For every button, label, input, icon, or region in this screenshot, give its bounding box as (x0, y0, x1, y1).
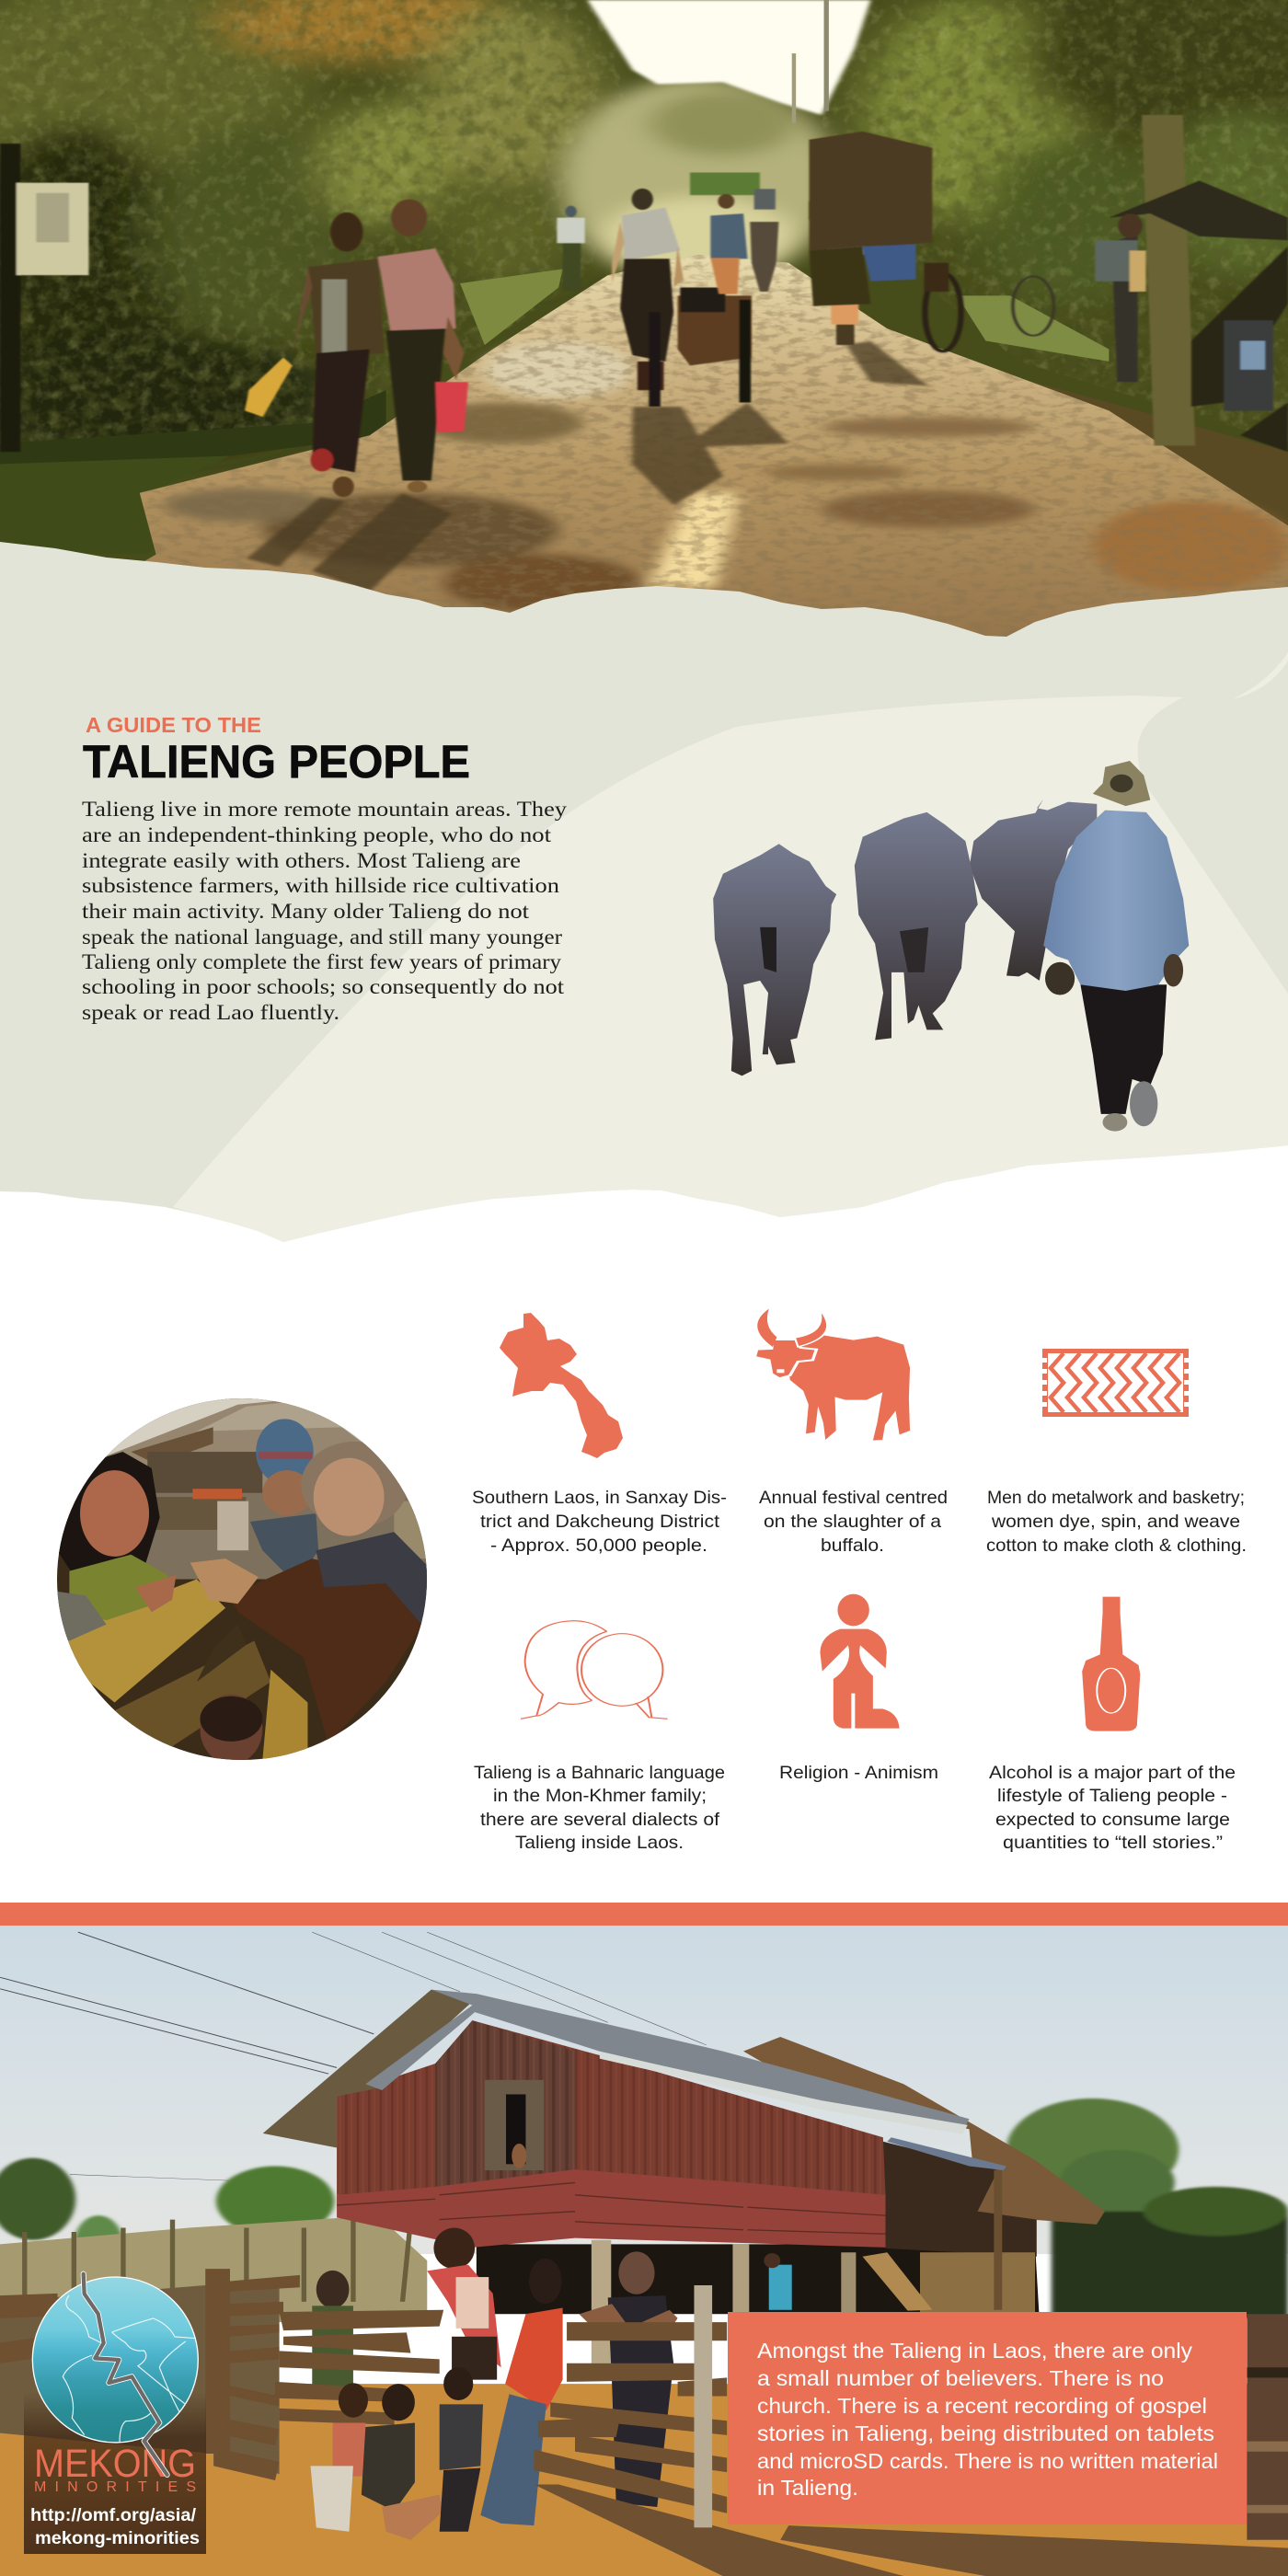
alcohol text: expected to consume large (995, 1810, 1230, 1830)
right wooden wall (1247, 2314, 1288, 2540)
fact: crafts (986, 1349, 1247, 1556)
gravel texture (0, 255, 1288, 644)
ground (0, 2384, 1288, 2576)
signboard (0, 144, 88, 452)
fact: religion (779, 1594, 938, 1783)
language text: there are several dialects of (480, 1810, 720, 1830)
grass verges (460, 269, 563, 345)
alcohol text: quantities to “tell stories.” (1003, 1833, 1223, 1853)
location text: trict and Dakcheung District (480, 1512, 720, 1532)
intro paragraph: Talieng only complete the first few years of primary (82, 950, 562, 973)
house dark underside and side room (477, 2142, 1039, 2363)
website url: mekong-minorities (35, 2529, 200, 2548)
intro paragraph: speak or read Lao fluently. (82, 1001, 339, 1024)
callout: believers and gospel recordings: Amongst the Talieng in Laos, there are only (757, 2339, 1192, 2363)
herder (1043, 761, 1189, 1132)
alcohol text: Alcohol is a major part of the (989, 1763, 1236, 1783)
fact: alcohol (989, 1597, 1236, 1853)
festival text: on the slaughter of a (764, 1512, 941, 1532)
crafts text: cotton to make cloth & clothing. (986, 1535, 1247, 1556)
language text: in the Mon-Khmer family; (493, 1786, 707, 1806)
icon: buffalo (754, 1309, 910, 1441)
girl in red jacket (427, 2228, 501, 2380)
log fence (0, 2269, 1288, 2576)
intro paragraph: Talieng live in more remote mountain areas. They (82, 798, 568, 821)
language text: Talieng is a Bahnaric language (474, 1763, 725, 1783)
logo: Mekong Minorities (24, 2274, 206, 2554)
icon: speech bubbles (521, 1621, 668, 1719)
festival text: buffalo. (821, 1535, 884, 1556)
festival text: Annual festival centred (759, 1488, 948, 1508)
location text: - Approx. 50,000 people. (490, 1535, 707, 1556)
man under the house (764, 2253, 780, 2268)
cyclist and sidecar (612, 189, 752, 407)
Mekong river line (84, 2274, 167, 2475)
woman in dark patterned top (579, 2251, 678, 2507)
religion text: Religion - Animism (779, 1763, 938, 1783)
icon: praying figure (820, 1594, 900, 1729)
buffalo one (713, 844, 836, 1075)
long shadows (247, 341, 928, 592)
metal roof (263, 1990, 1006, 2170)
fact: location (472, 1313, 727, 1556)
callout: believers and gospel recordings: and microSD cards. There is no written material (757, 2449, 1218, 2473)
bottom photo: stilt house and children (0, 1926, 1288, 2576)
intro paragraph: schooling in poor schools; so consequently do not (82, 975, 565, 998)
crafts text (986, 1488, 1247, 1556)
callout: believers and gospel recordings: church. There is a recent recording of gospel (757, 2394, 1207, 2418)
website url (30, 2506, 200, 2548)
children and adults at the fence (312, 2228, 780, 2525)
roadside shelter, pole and man (1095, 115, 1288, 452)
icon: woven cloth (1042, 1349, 1189, 1417)
callout: believers and gospel recordings (728, 2312, 1247, 2524)
fact: festival (754, 1309, 948, 1556)
hazy distant treeline (558, 78, 838, 283)
icon: map of Laos (500, 1313, 623, 1458)
crafts text: women dye, spin, and weave (991, 1512, 1240, 1532)
intro paragraph: speak the national language, and still many younger (82, 926, 562, 949)
MEKONG wordmark: MEKONG (34, 2442, 196, 2486)
hero photo: village road at sunrise (0, 0, 1288, 637)
logo globe with Mekong river (32, 2277, 198, 2443)
house upper wall (337, 2020, 886, 2195)
woman at left (57, 1452, 177, 1640)
loaded truck and bicycles (809, 132, 1054, 351)
foliage texture (0, 0, 1288, 448)
intro paragraph: subsistence farmers, with hillside rice cultivation (82, 874, 560, 897)
intro paragraph (82, 798, 568, 1024)
torn paper section background (0, 542, 1288, 1242)
thatched roof (743, 2037, 1105, 2225)
window with shutters (485, 2080, 544, 2170)
wood fence planks (57, 1579, 307, 1760)
light road sweep (173, 696, 1288, 1242)
alcohol text (989, 1763, 1236, 1853)
MINORITIES wordmark: MINORITIES (34, 2479, 196, 2495)
gravel road (0, 255, 1288, 644)
eyebrow: a guide to the: A GUIDE TO THE (86, 713, 261, 737)
orange divider band (0, 1903, 1288, 1926)
round photo: Talieng women (57, 1398, 427, 1760)
alcohol text: lifestyle of Talieng people - (997, 1786, 1227, 1806)
elder woman (190, 1442, 429, 1743)
location text (472, 1488, 727, 1556)
website url: http://omf.org/asia/ (30, 2506, 197, 2525)
village huts (74, 1398, 427, 1579)
photo cut-out: buffalo and herder (713, 761, 1189, 1132)
callout: believers and gospel recordings: a small number of believers. There is no (757, 2366, 1164, 2390)
language text: Talieng inside Laos. (515, 1833, 684, 1853)
two women walking (245, 200, 468, 497)
girl behind fence (312, 2271, 353, 2392)
small children in front (311, 2367, 483, 2540)
icon: bottle (1082, 1597, 1140, 1731)
fact: language (474, 1621, 725, 1853)
house lower cladding (337, 2169, 886, 2248)
buffalo two (855, 812, 978, 1041)
callout: believers and gospel recordings: in Talieng. (757, 2476, 858, 2500)
figures walking with head baskets (557, 173, 867, 345)
language text (474, 1763, 725, 1853)
intro paragraph: integrate easily with others. Most Talieng are (82, 849, 521, 872)
intro paragraph: are an independent-thinking people, who do not (82, 823, 552, 846)
title: Talieng people: TALIENG PEOPLE (83, 736, 470, 788)
intro paragraph: their main activity. Many older Talieng do not (82, 900, 530, 923)
location text: Southern Laos, in Sanxay Dis- (472, 1488, 727, 1508)
woman in striped headwrap (250, 1419, 318, 1583)
buffalo three (970, 799, 1097, 981)
road patches (165, 341, 1288, 612)
trees and background bushes (0, 2099, 1288, 2318)
child at bottom (200, 1695, 262, 1764)
bright sky (587, 0, 870, 115)
callout: believers and gospel recordings: stories in Talieng, being distributed on tablets (757, 2421, 1214, 2445)
festival text (759, 1488, 948, 1556)
boy in red shirt (480, 2259, 563, 2525)
back fence stakes (0, 2215, 427, 2474)
crafts text: Men do metalwork and basketry; (987, 1488, 1245, 1508)
